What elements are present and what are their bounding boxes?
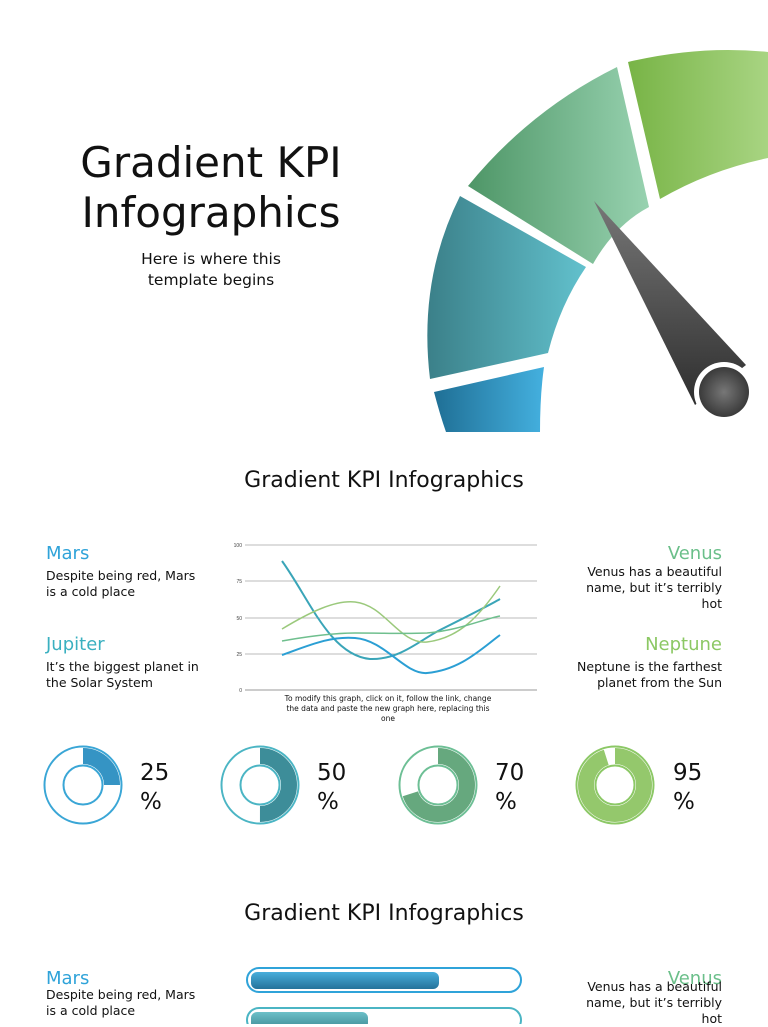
text: Mars bottom: Mars: [46, 968, 89, 989]
heading 1: Gradient KPI Infographics: [244, 468, 524, 493]
donut charts: %: [317, 789, 339, 815]
line chart: [234, 543, 537, 723]
bar 2: [247, 1008, 521, 1027]
text: Neptune: Neptune is the farthest planet from the Sun: [577, 659, 722, 690]
donut charts: 95: [673, 760, 702, 786]
donut charts: 25: [140, 760, 169, 786]
title: Infographics: [81, 188, 341, 237]
text: Jupiter: [45, 634, 199, 690]
donut charts: %: [140, 789, 162, 815]
title: [80, 138, 342, 237]
text: Mars bottom: [46, 968, 195, 1018]
text: Neptune: [577, 634, 722, 690]
gauge: [427, 50, 768, 432]
subtitle: template begins: [148, 271, 274, 289]
text: Jupiter: Jupiter: [46, 634, 105, 655]
text: Venus: Venus: [668, 543, 722, 564]
text: Mars: Mars: [46, 543, 89, 564]
line chart: 25: [236, 652, 242, 658]
donut charts: [44, 746, 702, 824]
donut charts: 70: [495, 760, 524, 786]
line chart: To modify this graph, click on it, follow the link, change: [284, 694, 492, 703]
needle: [594, 201, 754, 422]
line chart: 100: [234, 543, 242, 549]
bar 1: [247, 968, 521, 992]
progress bars: [246, 967, 522, 1024]
line chart: the data and paste the new graph here, replacing this: [286, 704, 490, 713]
text: Venus bottom: Venus: [668, 968, 722, 989]
line chart: 75: [236, 579, 242, 585]
heading 2: Gradient KPI Infographics: [244, 901, 524, 926]
text: Venus: [586, 543, 722, 611]
donut charts: %: [495, 789, 517, 815]
subtitle: [141, 250, 281, 289]
line chart: one: [381, 714, 395, 723]
text: Venus: Venus has a beautiful name, but it’s terribly hot: [586, 564, 722, 611]
donut 70: [400, 746, 476, 824]
line chart: 0: [239, 688, 242, 694]
donut charts: %: [673, 789, 695, 815]
title: Gradient KPI: [80, 138, 342, 187]
donut 25: [44, 746, 122, 824]
text: Jupiter: It’s the biggest planet in the Solar System: [46, 659, 199, 690]
text: Venus bottom: Venus has a beautiful name, but it’s terribly hot: [586, 979, 722, 1026]
text: Mars: [46, 543, 195, 599]
donut 50: [222, 746, 298, 824]
subtitle: Here is where this: [141, 250, 281, 268]
donut 95: [576, 746, 654, 824]
donut charts: 50: [317, 760, 346, 786]
line chart: 50: [236, 616, 242, 622]
text: Mars: Despite being red, Mars is a cold place: [46, 568, 195, 599]
text: Mars bottom: Despite being red, Mars is a cold place: [46, 987, 195, 1018]
text: Neptune: Neptune: [645, 634, 722, 655]
